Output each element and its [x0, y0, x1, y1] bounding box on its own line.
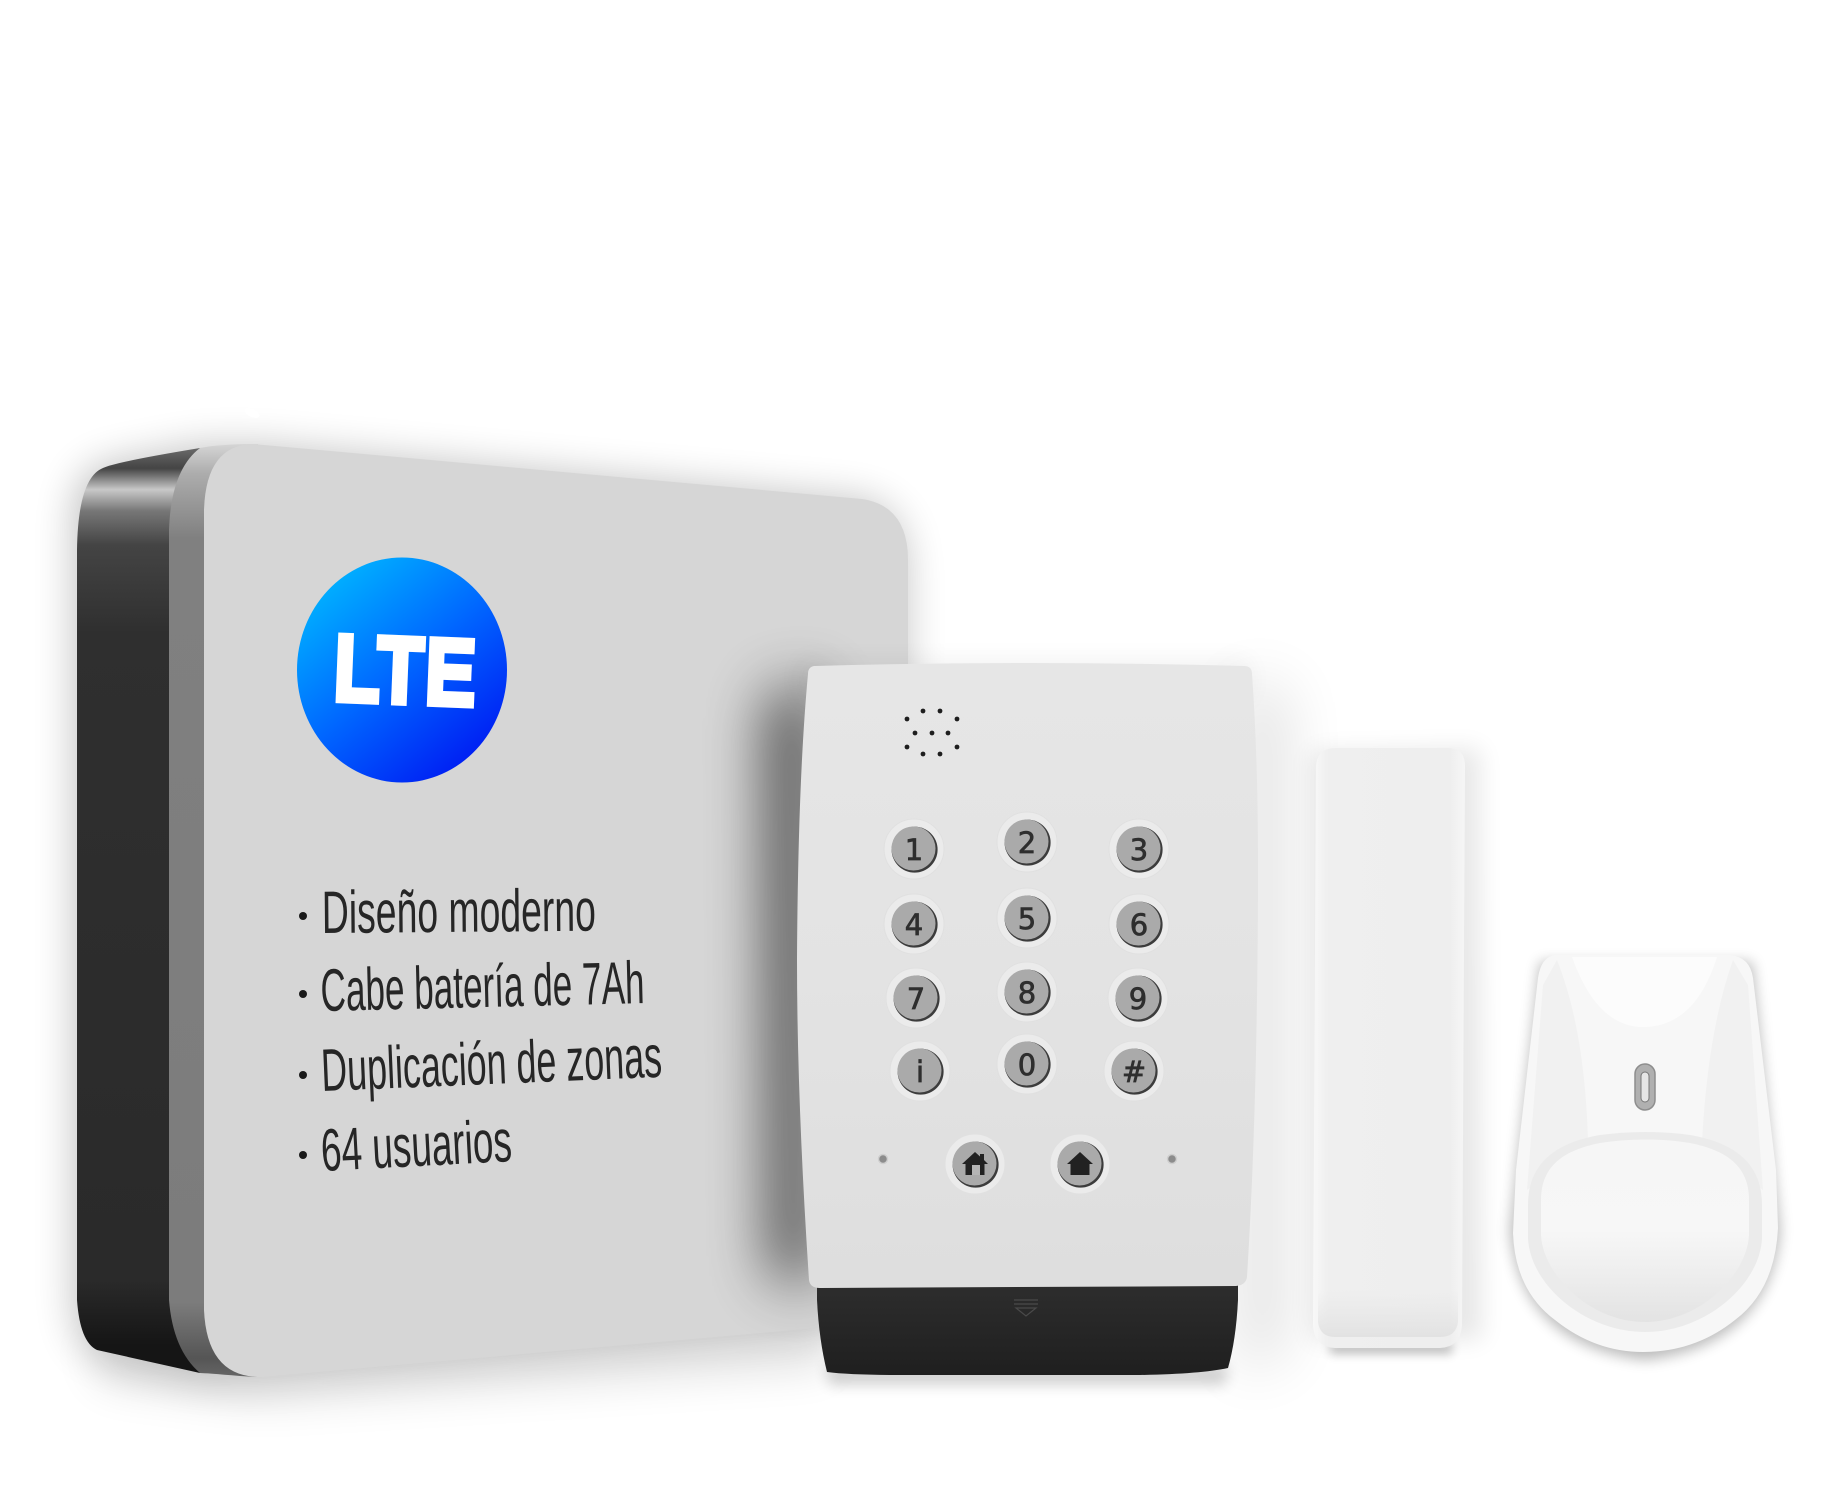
PIR motion sensor [1513, 955, 1778, 1352]
keypad device [797, 663, 1258, 1375]
button labels: 6 [1130, 908, 1148, 942]
box front face [204, 444, 908, 1377]
button labels: 0 [1018, 1048, 1036, 1082]
feature list [299, 877, 663, 1184]
LTE badge [297, 558, 507, 782]
PIR sensor shadow [1510, 962, 1780, 1360]
arrow mark on base [1014, 1300, 1038, 1316]
feature list: Duplicación de zonas [320, 1023, 663, 1104]
icon: house outline button [962, 1152, 988, 1175]
door contact shadow [1312, 748, 1482, 1354]
PIR upper highlight [1572, 957, 1717, 1027]
button labels: 5 [1018, 902, 1036, 936]
button labels: 4 [905, 908, 923, 942]
button caps [892, 820, 1160, 1186]
PIR status light [1635, 1064, 1655, 1110]
panel: LTE control box [77, 444, 908, 1377]
button labels: 9 [1129, 982, 1147, 1016]
PIR lens rim [1528, 1132, 1762, 1332]
feature list: 64 usuarios [319, 1107, 513, 1184]
PIR lens dome [1541, 1140, 1749, 1322]
box dark side [77, 448, 240, 1373]
PIR outer housing [1513, 955, 1778, 1352]
button labels: # [1122, 1055, 1146, 1089]
keypad shadow on box [768, 660, 1285, 1385]
button labels: 7 [907, 982, 925, 1016]
button labels [905, 826, 1148, 1089]
button labels: i [916, 1055, 924, 1089]
button labels: 3 [1130, 833, 1148, 867]
icon: house solid button [1067, 1152, 1093, 1175]
main box soft shadow [74, 446, 906, 1405]
feature list: Diseño moderno [322, 877, 596, 946]
button labels: 8 [1018, 976, 1036, 1010]
contact lower shading [1318, 1290, 1458, 1337]
white flecks [243, 406, 1354, 1419]
door contact sensor [1313, 748, 1465, 1348]
keypad white body [797, 663, 1258, 1288]
keypad black base [817, 1280, 1238, 1375]
button rings [884, 812, 1169, 1194]
button labels: 1 [905, 833, 923, 867]
speaker holes [905, 709, 959, 756]
LTE badge: LTE [332, 615, 480, 726]
status LEDs [878, 1154, 1176, 1164]
feature list: Cabe batería de 7Ah [320, 949, 645, 1024]
box grey edge strip [169, 444, 258, 1377]
button labels: 2 [1018, 826, 1036, 860]
button rims [892, 820, 1163, 1188]
PIR shoulder shading [1527, 960, 1763, 1190]
